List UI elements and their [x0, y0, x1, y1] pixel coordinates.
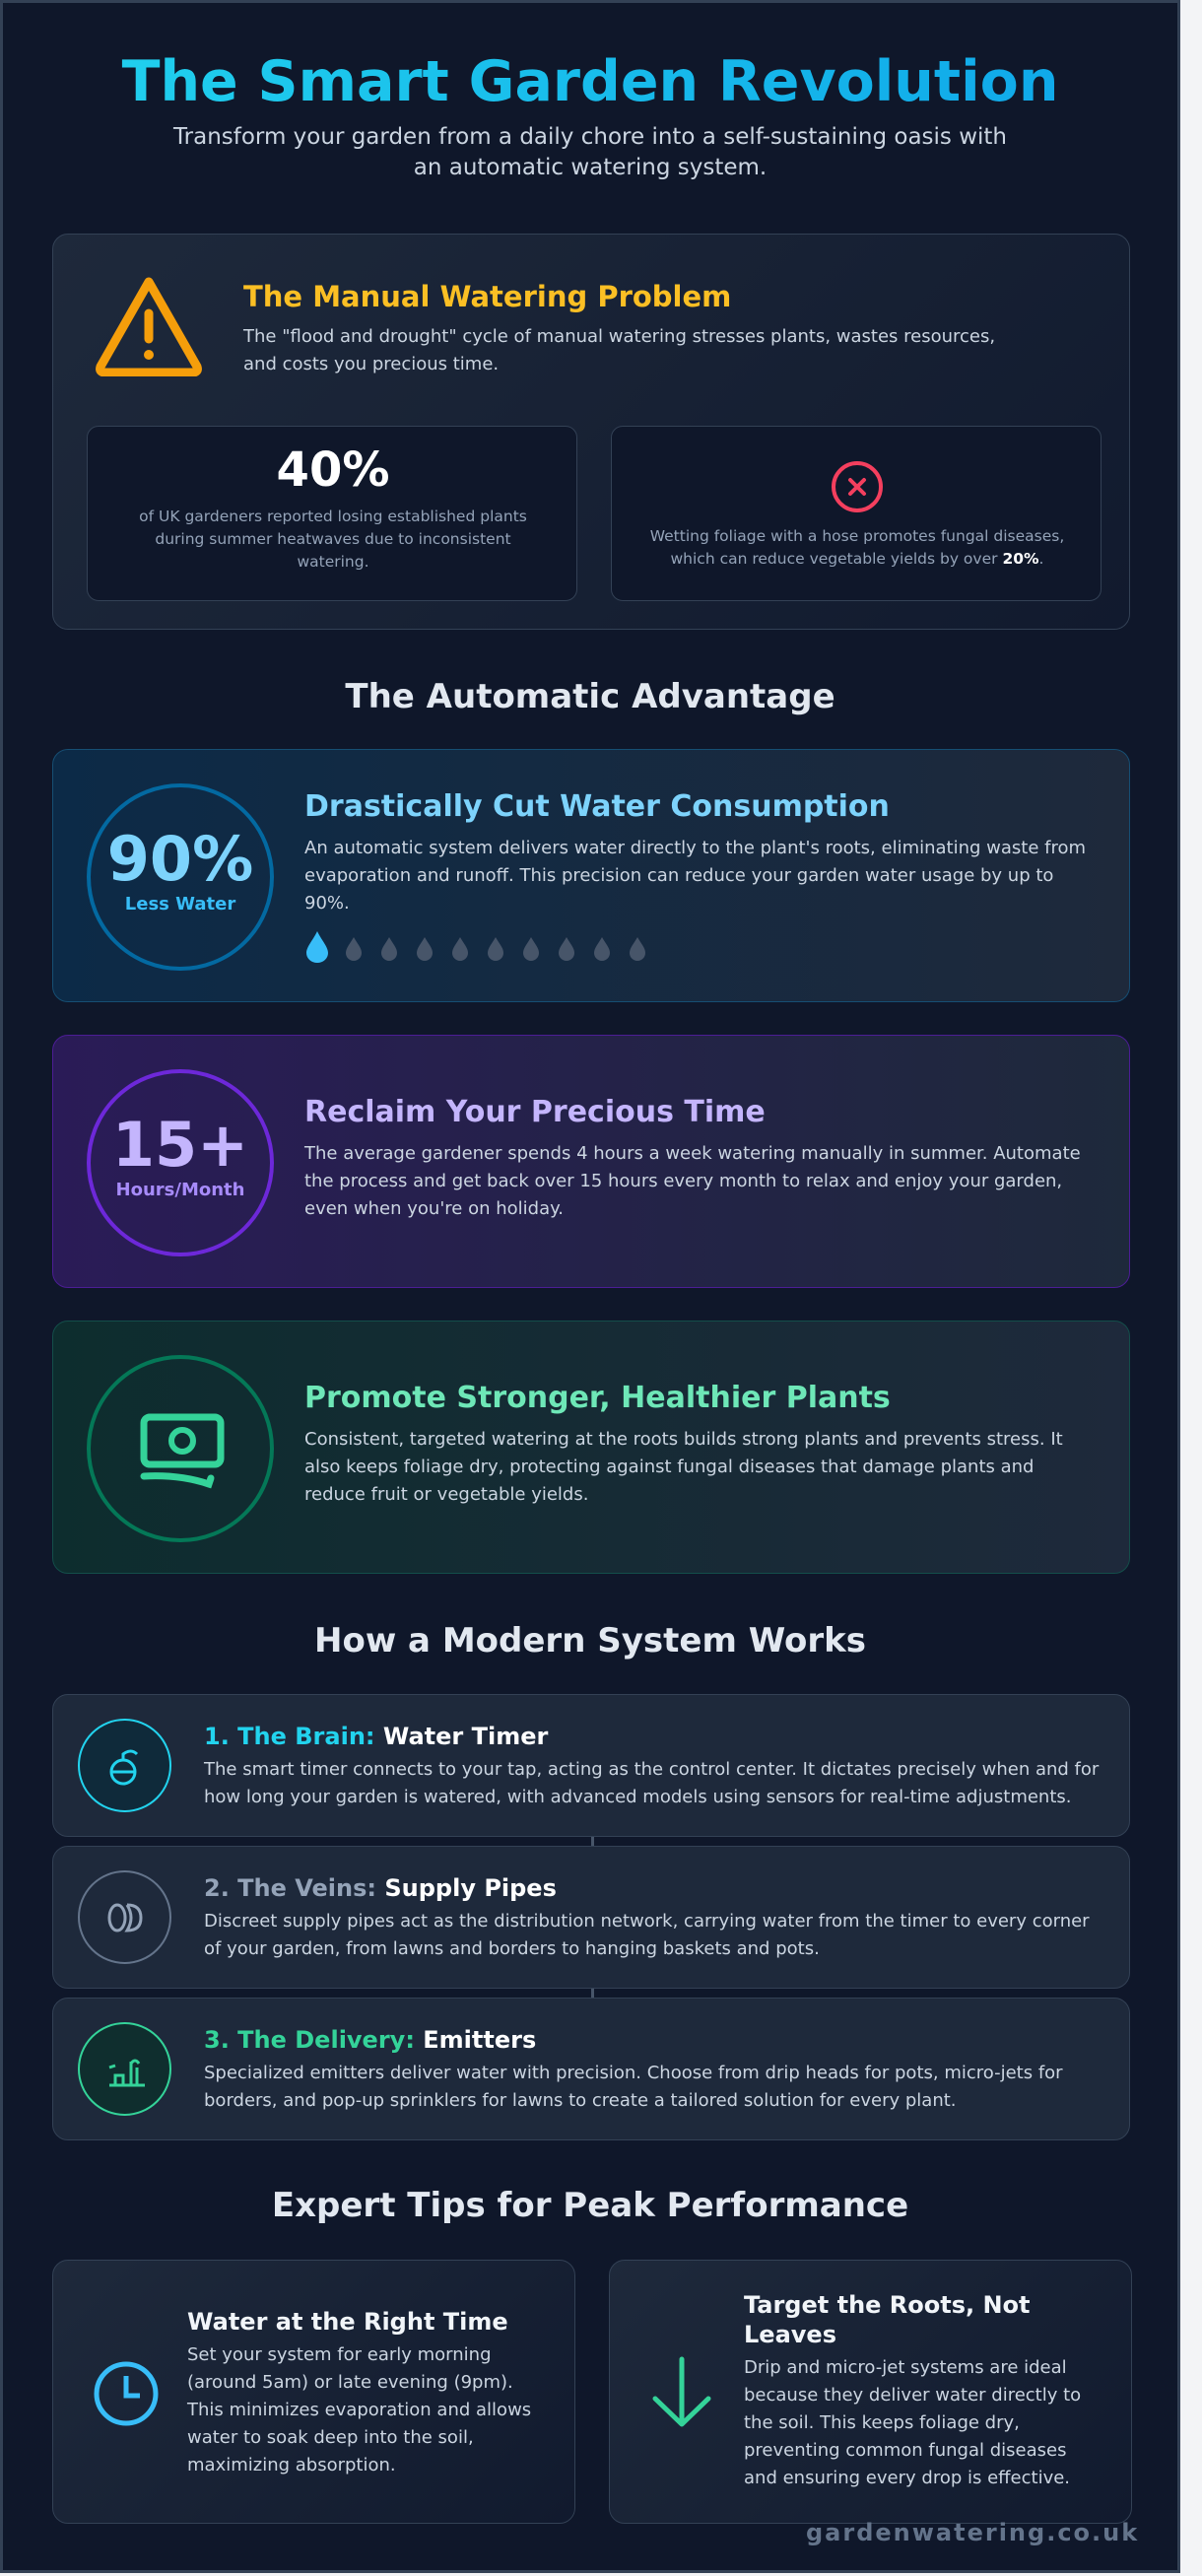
- stat circle: 90%: [87, 783, 274, 971]
- tip title: Target the Roots, Not Leaves: [744, 2291, 1031, 2348]
- stat card: 40%: [87, 426, 577, 601]
- connector lines: [591, 1836, 594, 1850]
- heading: expert tips: Expert Tips for Peak Performance: [272, 2186, 908, 2225]
- text block: The average gardener spends 4 hours a week watering manually in summer. Automate the process and get back over 15 hours every month to relax and enjoy your garden, even when you're on holiday.: [304, 1143, 1081, 1219]
- title: [3, 42, 1177, 121]
- icon circle: money: [87, 1355, 274, 1542]
- icon: timer: [78, 1719, 171, 1812]
- icon: warning triangle: [96, 278, 202, 376]
- icon: emitters: [78, 2022, 171, 2116]
- text block: Consistent, targeted watering at the roots builds strong plants and prevents stress. It also keeps foliage dry, protecting against fungal diseases that damage plants and reduce fruit or vegetable yields.: [304, 1429, 1063, 1505]
- stat circle: 15+: 15+: [112, 1109, 248, 1181]
- tip text: Drip and micro-jet systems are ideal because they deliver water directly to the soil. This keeps foliage dry, preventing common fungal diseases and ensuring every drop is effective.: [744, 2357, 1081, 2488]
- step title: 1. The Brain: Water Timer: [204, 1723, 548, 1750]
- step 2: supply pipes: [52, 1846, 1130, 1989]
- step 1: water timer: [52, 1694, 1130, 1837]
- watermark: gardenwatering.co.uk: [806, 2519, 1139, 2546]
- heading: The Manual Watering Problem: [243, 280, 731, 313]
- icon: pipes: [78, 1870, 171, 1964]
- panel: healthier plants: [52, 1321, 1130, 1574]
- stat card: fungal diseases: [611, 426, 1102, 601]
- tip card: roots: [609, 2260, 1132, 2524]
- panel: water consumption: [52, 749, 1130, 1002]
- stat circle: 90%: Less Water: [125, 894, 235, 915]
- icon: clock: [95, 2361, 158, 2426]
- stat circle: 15+: [87, 1069, 274, 1256]
- text block: The "flood and drought" cycle of manual watering stresses plants, wastes resources, and costs you precious time.: [243, 326, 995, 374]
- stat card: 40%: 40%: [277, 442, 389, 498]
- tip title: Water at the Right Time: [187, 2308, 508, 2336]
- step 3: emitters: [52, 1998, 1130, 2140]
- icon: down arrow: [652, 2357, 711, 2426]
- step text: Specialized emitters deliver water with precision. Choose from drip heads for pots, micro-jets for borders, and pop-up sprinklers for lawns to create a tailored solution for every plant.: [204, 2063, 1063, 2111]
- stat circle: 15+: Hours/Month: [116, 1180, 244, 1200]
- heading: how it works: How a Modern System Works: [314, 1621, 866, 1661]
- stat card: 40%: of UK gardeners reported losing established plants during summer heatwaves due to inconsistent watering.: [139, 508, 527, 571]
- panel: reclaim time: [52, 1035, 1130, 1288]
- heading: automatic advantage: The Automatic Advantage: [345, 677, 835, 716]
- step text: Discreet supply pipes act as the distribution network, carrying water from the timer to every corner of your garden, from lawns and borders to hanging baskets and pots.: [204, 1911, 1090, 1959]
- stat card: fungal diseases: Wetting foliage with a hose promotes fungal diseases, which can reduce vegetable yields by over 20%.: [650, 527, 1064, 568]
- title: The Smart Garden Revolution: [122, 49, 1058, 114]
- step title: 2. The Veins: Supply Pipes: [204, 1874, 557, 1902]
- stat circle: 90%: 90%: [107, 823, 253, 895]
- icon row: water drops: [306, 931, 645, 963]
- heading: Reclaim Your Precious Time: [304, 1095, 766, 1129]
- step title: 3. The Delivery: Emitters: [204, 2026, 536, 2054]
- tip card: right time: [52, 2260, 575, 2524]
- heading: Drastically Cut Water Consumption: [304, 789, 890, 824]
- tip text: Set your system for early morning (around 5am) or late evening (9pm). This minimizes evaporation and allows water to soak deep into the soil, maximizing absorption.: [187, 2344, 531, 2475]
- subtitle: Transform your garden from a daily chore into a self-sustaining oasis with an automatic watering system.: [173, 124, 1007, 180]
- icon: x circle: [832, 461, 883, 512]
- text block: An automatic system delivers water directly to the plant's roots, eliminating waste from evaporation and runoff. This precision can reduce your garden water usage by up to 90%.: [304, 838, 1086, 914]
- panel: manual watering problem: [52, 234, 1130, 630]
- heading: Promote Stronger, Healthier Plants: [304, 1381, 891, 1415]
- step text: The smart timer connects to your tap, acting as the control center. It dictates precisely when and for how long your garden is watered, with advanced models using sensors for real-time adjustments.: [204, 1759, 1099, 1807]
